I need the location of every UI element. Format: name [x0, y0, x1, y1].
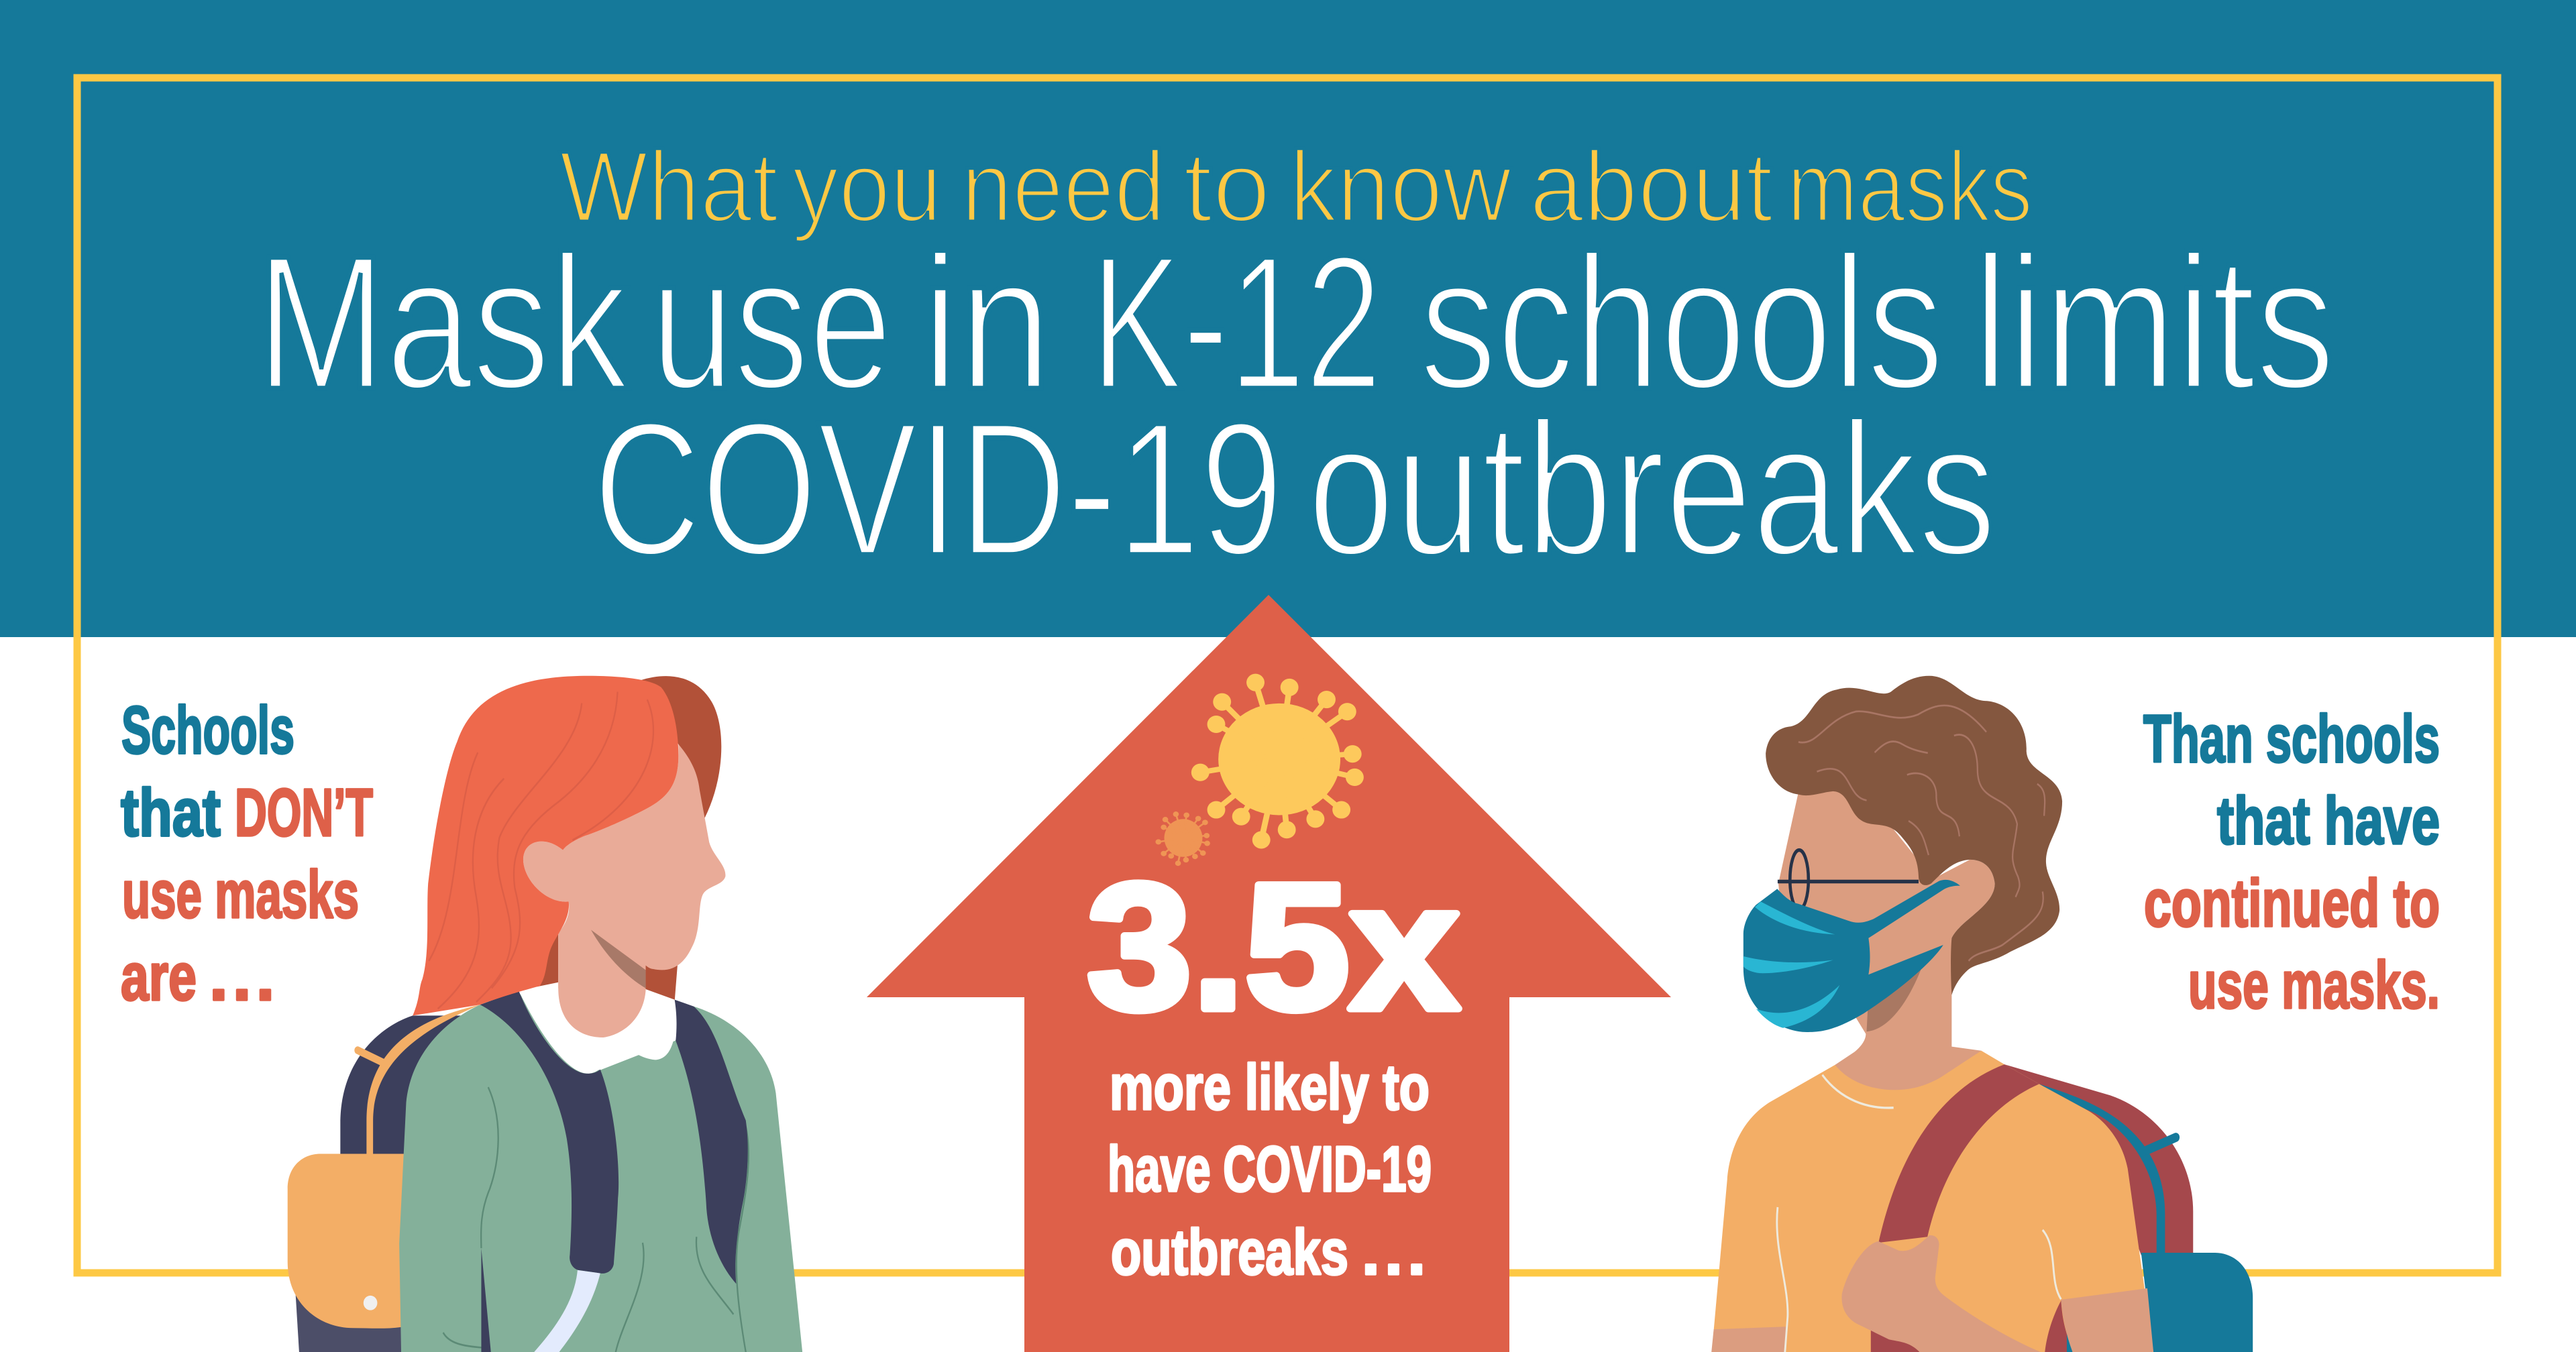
kicker heading: to [1183, 130, 1271, 243]
Schools: Schools [121, 693, 294, 768]
arrow shape [867, 595, 1671, 1352]
shoulder strap [1878, 1064, 2039, 1243]
arms [1711, 1288, 2153, 1352]
hand on strap [1841, 1235, 2041, 1352]
illustration: girl without mask [288, 676, 802, 1352]
kicker heading: about [1529, 130, 1773, 243]
ellipsis: ... [209, 940, 279, 1015]
kicker heading: you [792, 130, 942, 243]
kicker heading: What [559, 130, 778, 243]
ellipsis: ... [1362, 1217, 1431, 1288]
icon: small virus [1155, 811, 1210, 866]
big number 3.5x [1087, 846, 1461, 1047]
chin shadow [591, 930, 646, 989]
DON'T: DON’T [235, 775, 373, 850]
kicker heading: masks [1787, 130, 2033, 243]
kicker heading: know [1289, 130, 1512, 243]
illustration: boy with mask [1711, 676, 2253, 1352]
jaw shadow [1866, 968, 1922, 1031]
backpack [288, 1005, 480, 1352]
icon: large virus [1191, 674, 1364, 848]
main heading line 1: use [651, 217, 892, 429]
big number 3.5x: x [1349, 846, 1461, 1047]
face mask [1743, 880, 1960, 1032]
neck and face skin [1778, 787, 1995, 1090]
main heading line 2: outbreaks [1307, 383, 1996, 596]
that have: that have [2217, 783, 2440, 858]
central up arrow [867, 595, 1671, 1352]
hair strands [429, 692, 653, 1009]
front hair [413, 676, 678, 1015]
Than schools: Than schools [2143, 701, 2440, 777]
main heading line 1: schools [1419, 217, 1944, 429]
title block [256, 130, 2335, 596]
that: that [121, 775, 221, 850]
teal header band [0, 0, 2576, 637]
main heading line 2 [593, 383, 1996, 596]
backpack straps [480, 991, 748, 1352]
main heading line 2: COVID-19 [593, 383, 1283, 596]
shirt folds [1777, 1075, 2061, 1352]
main heading line 1: Mask [256, 217, 631, 429]
main heading line 1: K-12 [1091, 217, 1382, 429]
have COVID-19: have COVID-19 [1108, 1133, 1432, 1205]
hair curls [1799, 706, 2045, 961]
backpack [2004, 1064, 2253, 1352]
use masks.: use masks. [2188, 948, 2440, 1023]
left text block [121, 693, 373, 1015]
are: are [121, 940, 197, 1015]
continued to: continued to [2144, 866, 2440, 941]
glasses [1778, 850, 1919, 909]
main heading line 1: in [922, 217, 1052, 429]
more likely to: more likely to [1110, 1052, 1430, 1123]
big number 3.5x: 3.5 [1087, 846, 1350, 1047]
main heading line 1 [256, 217, 2335, 429]
shirt [1712, 1051, 2153, 1352]
outbreaks: outbreaks [1111, 1217, 1348, 1288]
sweater [399, 993, 802, 1352]
back hair [536, 676, 721, 1002]
face and neck [523, 744, 725, 1037]
collar [519, 982, 676, 1074]
main heading line 1: limits [1973, 217, 2335, 429]
hair [1766, 676, 2062, 995]
use masks: use masks [122, 857, 359, 932]
kicker heading [559, 130, 2033, 243]
kicker heading: need [961, 130, 1165, 243]
right text block [2143, 701, 2440, 1023]
sweater folds [443, 1087, 749, 1352]
